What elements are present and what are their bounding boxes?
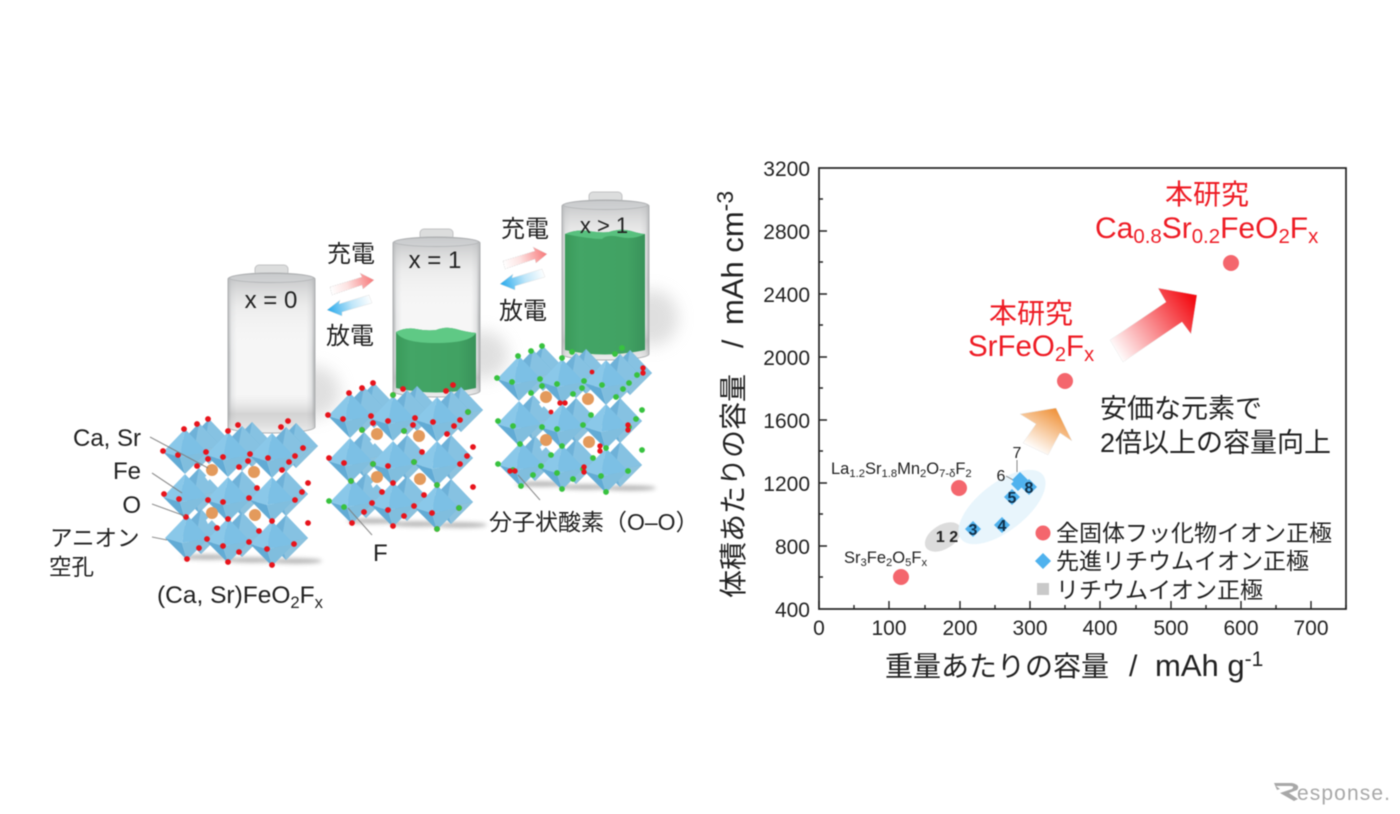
label: La1.2Sr1.8Mn2O7-dF2: 1.2 [849,468,865,480]
label: this study SrFeO2Fx: 本研究 [989,298,1073,329]
y axis tick labels: 400 [775,599,810,622]
crystal labels: O [122,492,141,519]
battery x > 1 [562,192,678,360]
data point: Ca0.8Sr0.2FeO2Fx [1223,255,1239,271]
data point: SrFeO2Fx [1057,373,1073,389]
cluster: advanced lithium-ion cathodes: 6 [997,468,1006,485]
crystal labels: (Ca, Sr)FeO [157,582,290,609]
charge and discharge labels: 放電 [326,323,374,350]
y axis tick labels: 2800 [763,221,810,244]
charge and discharge labels [326,216,549,350]
x axis tick labels: 600 [1223,617,1259,640]
label: Sr3Fe2O5Fx: 2 [886,557,892,569]
callout: cheap elements, over twofold capacity: 2倍以上の容量向上 [1100,428,1331,458]
label: La1.2Sr1.8Mn2O7-dF2: 2 [920,468,926,480]
label: this study Ca0.8Sr0.2FeO2Fx: 2 [1278,226,1290,248]
legend: 先進リチウムイオン正極 [1056,548,1309,574]
crystal labels: 分子状酸素（O–O） [489,509,699,535]
crystal labels: x [315,593,324,612]
cluster: advanced lithium-ion cathodes: 5 [1008,490,1017,507]
crystal labels: F [373,540,388,567]
y axis tick labels: 1600 [763,410,810,433]
label: Sr3Fe2O5Fx: x [921,557,927,569]
label: La1.2Sr1.8Mn2O7-dF2: 7-δ [939,468,955,480]
label: this study SrFeO2Fx: SrFeO [968,330,1055,363]
battery x = 0: x = 0 [245,287,297,314]
label: La1.2Sr1.8Mn2O7-dF2: La [831,460,849,478]
label: Sr3Fe2O5Fx: F [911,549,921,567]
battery x > 1: x > 1 [580,213,628,238]
cluster: advanced lithium-ion cathodes: 4 [998,518,1007,535]
label: La1.2Sr1.8Mn2O7-dF2: F [955,460,965,478]
label: this study SrFeO2Fx: 2 [1055,344,1066,366]
x axis tick labels: 400 [1082,617,1118,640]
battery x = 0 [228,265,340,433]
y axis tick labels: 3200 [763,158,810,181]
battery x = 1: x = 1 [409,247,461,274]
x axis tick labels: 500 [1153,617,1189,640]
x axis title: / [1129,650,1138,683]
label: this study SrFeO2Fx: F [1066,330,1084,363]
y axis tick labels [763,158,810,622]
label: this study Ca0.8Sr0.2FeO2Fx [1095,179,1318,248]
label: La1.2Sr1.8Mn2O7-dF2: Sr [865,460,882,478]
cluster: advanced lithium-ion cathodes [946,445,1058,558]
legend: リチウムイオン正極 [1056,577,1263,603]
crystal labels: アニオン [50,526,140,551]
x axis tick labels: 300 [1012,617,1048,640]
crystal labels: Ca, Sr [73,425,141,452]
label: Sr3Fe2O5Fx: 5 [905,557,911,569]
charge and discharge arrows, left pair [327,273,374,316]
label: La1.2Sr1.8Mn2O7-dF2: 1.8 [881,468,897,480]
x axis tick labels: 100 [871,617,907,640]
data point: Sr3Fe2O5Fx [893,569,909,585]
battery x = 1 [393,229,508,397]
arrow: orange [1020,408,1072,455]
label: this study Ca0.8Sr0.2FeO2Fx: 0.8 [1133,226,1162,248]
y axis title: 体積あたりの容量 [718,374,749,598]
x axis tick labels [813,617,1329,640]
x axis title: -1 [1245,648,1263,671]
x axis title: 重量あたりの容量 [885,651,1109,682]
cluster: advanced lithium-ion cathodes: 3 [969,522,978,539]
cluster: advanced lithium-ion cathodes: 8 [1025,480,1034,497]
label: La1.2Sr1.8Mn2O7-dF2: O [926,460,939,478]
y axis tick labels: 2400 [763,284,810,307]
legend: 全固体フッ化物イオン正極 [1056,520,1332,546]
x axis tick labels: 700 [1293,617,1329,640]
crystal: (Ca, Sr)FeO2Fx [160,416,322,568]
label: La1.2Sr1.8Mn2O7-dF2: Mn [897,460,920,478]
panel: battery and crystal illustration [49,192,699,612]
cluster: advanced lithium-ion cathodes: 7 [1013,445,1022,462]
cluster: lithium-ion cathodes [920,516,966,558]
x axis tick labels: 0 [813,617,825,640]
y axis title: / [717,339,750,348]
callout: cheap elements, over twofold capacity: 安価な元素で [1100,394,1262,424]
x axis title: mAh g [1155,648,1245,683]
crystal labels: 空孔 [49,555,94,580]
label: La1.2Sr1.8Mn2O7-dF2: 2 [965,468,972,480]
crystal labels: 2 [290,593,300,612]
arrow: red [1110,288,1197,362]
watermark: Response: esponse. [1297,782,1390,805]
y axis tick labels: 2000 [763,347,810,370]
charge and discharge labels: 放電 [499,298,547,325]
data point: La1.2Sr1.8Mn2O7-dF2 [951,480,967,496]
crystal labels: Fe [113,458,141,485]
y axis tick labels: 1200 [763,473,810,496]
label: this study Ca0.8Sr0.2FeO2Fx: FeO [1220,212,1278,245]
panel: scatter chart [712,158,1346,683]
label: this study Ca0.8Sr0.2FeO2Fx: 本研究 [1165,179,1249,210]
label: this study Ca0.8Sr0.2FeO2Fx: F [1290,212,1308,245]
cluster: lithium-ion cathodes: 1 2 [936,529,958,546]
label: this study Ca0.8Sr0.2FeO2Fx: Sr [1162,212,1192,245]
label: Sr3Fe2O5Fx: Sr [844,549,860,567]
crystal labels [49,425,699,612]
charge and discharge labels: 充電 [501,216,549,243]
y axis tick labels: 800 [775,536,810,559]
callout: cheap elements, over twofold capacity [1100,394,1331,458]
label: this study Ca0.8Sr0.2FeO2Fx: x [1308,226,1318,248]
y axis title: -3 [712,191,738,211]
label: this study SrFeO2Fx: x [1084,344,1094,366]
charge and discharge labels: 充電 [327,241,375,268]
label: this study SrFeO2Fx [968,298,1094,366]
chart frame and ticks [819,168,1346,609]
label: Sr3Fe2O5Fx: 3 [860,557,867,569]
x axis tick labels: 200 [942,617,978,640]
label: Sr3Fe2O5Fx: Fe [867,549,886,567]
charge and discharge arrows, right pair [500,247,547,290]
legend [1035,520,1332,603]
crystal: x > 1 with molecular oxygen [494,343,656,495]
label: this study Ca0.8Sr0.2FeO2Fx: Ca [1095,212,1133,245]
y axis title: mAh cm [715,211,750,325]
crystal leader lines [150,437,540,540]
crystal labels: F [300,582,315,609]
label: this study Ca0.8Sr0.2FeO2Fx: 0.2 [1192,226,1220,248]
crystal: x = 1 with fluorine [325,380,487,532]
label: Sr3Fe2O5Fx: O [892,549,905,567]
